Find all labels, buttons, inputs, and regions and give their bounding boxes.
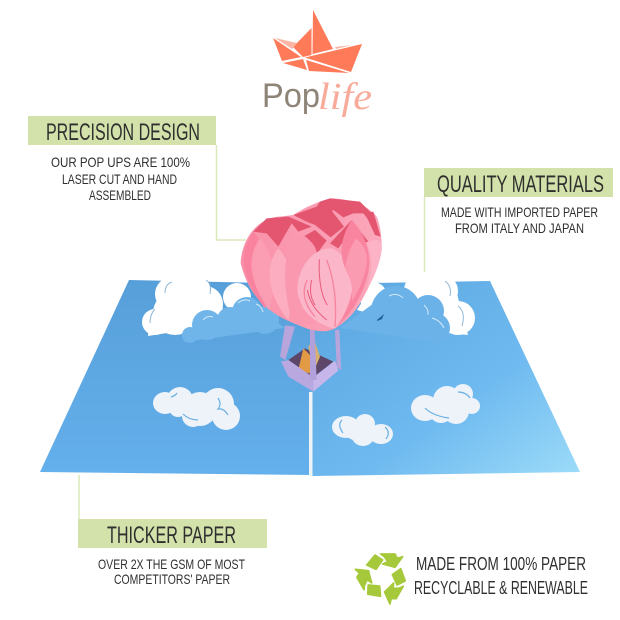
pop-up hot air balloon — [241, 198, 382, 392]
flat cloud left — [153, 387, 240, 430]
blue cloud left — [182, 297, 285, 343]
logo wordmark: life — [318, 76, 372, 118]
back white clouds right — [357, 274, 475, 335]
balloon front bulb — [297, 248, 353, 328]
logo wordmark — [262, 76, 372, 118]
icon: recycle — [353, 554, 410, 605]
panel: thicker paper: THICKER PAPER — [107, 522, 236, 549]
balloon basket and ropes — [280, 319, 341, 392]
panel: quality materials — [424, 168, 613, 272]
panel: thicker paper — [78, 475, 267, 587]
panel: precision design: OUR POP UPS ARE 100% — [51, 154, 190, 170]
recycling text — [414, 554, 588, 598]
balloon right petals — [337, 220, 382, 327]
panel: precision design — [28, 116, 246, 240]
pop-up card base — [40, 280, 580, 476]
logo wordmark: Pop — [262, 77, 320, 115]
flat cloud right — [411, 384, 480, 424]
back white clouds left — [142, 273, 251, 336]
panel: thicker paper: OVER 2X THE GSM OF MOST — [98, 556, 245, 572]
panel: precision design: LASER CUT AND HAND — [62, 171, 177, 187]
balloon left petals — [244, 232, 317, 325]
panel: precision design: PRECISION DESIGN — [46, 119, 200, 146]
panel: thicker paper: COMPETITORS' PAPER — [114, 571, 230, 587]
logo: Poplife paper boat — [273, 10, 362, 73]
panel: precision design: ASSEMBLED — [89, 187, 151, 203]
blue cloud right — [340, 286, 450, 343]
flat cloud centre — [332, 414, 393, 446]
balloon dark recesses — [253, 198, 381, 254]
panel: quality materials: FROM ITALY AND JAPAN — [455, 220, 584, 236]
balloon body — [241, 198, 382, 331]
